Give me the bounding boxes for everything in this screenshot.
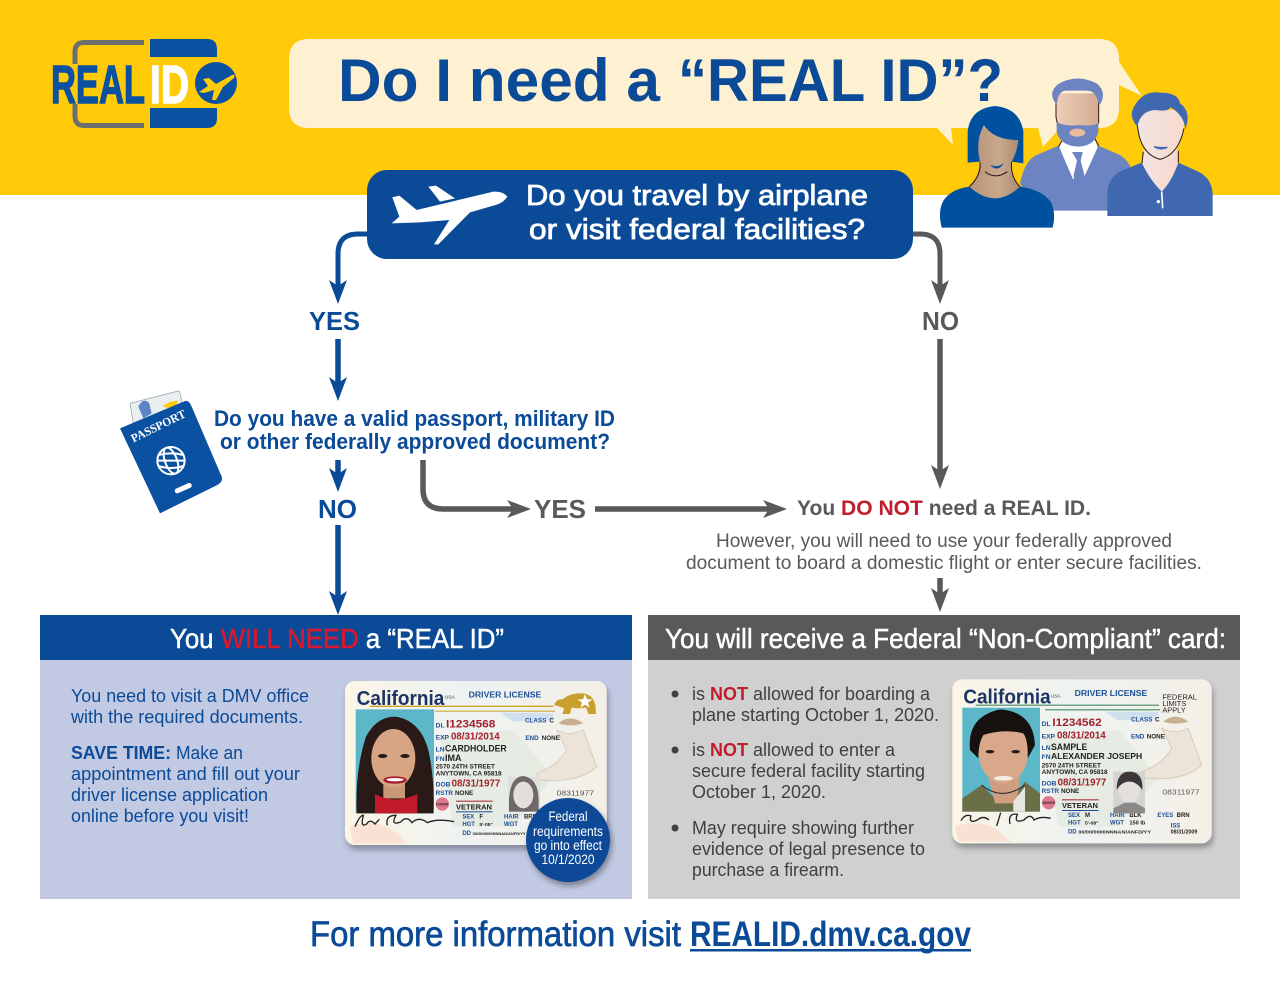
card: non-compliant sample license: FEDERAL <box>1162 694 1197 701</box>
card: REAL ID sample license: 08311977 <box>557 789 594 798</box>
card: non-compliant sample license: LN <box>1042 745 1051 752</box>
card: non-compliant sample license: USA <box>1051 693 1061 698</box>
card: REAL ID sample license: RSTR <box>436 790 453 797</box>
arrow: passport question to YES <box>423 460 523 509</box>
card: non-compliant sample license: DONOR <box>1042 801 1055 805</box>
card: REAL ID sample license: DONOR <box>436 802 449 806</box>
card: non-compliant sample license: 08/31/2009 <box>1171 829 1197 835</box>
card: non-compliant sample license: 08/31/2014 <box>1057 730 1106 741</box>
card: non-compliant sample license: 150 lb <box>1129 821 1146 827</box>
passport question text: Do you have a valid passport, military ID <box>214 406 615 431</box>
question text: or visit federal facilities? <box>529 214 865 246</box>
title: Do I need a <box>338 47 661 114</box>
card: non-compliant sample license: BRN <box>1177 813 1190 819</box>
yellow header band <box>0 0 1280 195</box>
card: non-compliant sample license: ANYTOWN, CA 95818 <box>1042 770 1108 776</box>
card: non-compliant sample license: California <box>963 686 1051 708</box>
arrow: to non-compliant panel <box>937 578 943 604</box>
icon: passport: PASSPORT <box>129 407 188 445</box>
card: non-compliant sample license: 5'-08" <box>1085 821 1099 827</box>
badge: federal requirements: requirements <box>533 824 603 839</box>
card: non-compliant sample license: ALEXANDER JOSEPH <box>1051 751 1142 761</box>
card: non-compliant sample license: 08311977 <box>1162 788 1200 797</box>
icon: airplane <box>392 186 507 244</box>
title: “REAL ID”? <box>678 47 1003 114</box>
card: REAL ID sample license: 2570 24TH STREET <box>436 765 495 771</box>
panel body text: Make an <box>176 742 243 763</box>
label: YES: YES <box>309 306 360 336</box>
badge: federal requirements: Federal <box>548 809 588 824</box>
card: non-compliant sample license: DL <box>1042 721 1051 728</box>
card: non-compliant sample license: LIMITS <box>1162 701 1187 708</box>
person: man with beard <box>1020 78 1132 211</box>
bullet list: plane starting October 1, 2020. <box>692 704 939 725</box>
panel: will need a REAL ID <box>40 615 632 899</box>
label: YES middle: YES <box>534 494 586 524</box>
card: non-compliant sample license: RSTR <box>1042 788 1059 795</box>
card: REAL ID sample license: DD <box>462 831 472 837</box>
bullet list: is NOT allowed for boarding a <box>692 683 935 704</box>
card: REAL ID sample license: USA <box>445 694 455 699</box>
panel body text: appointment and fill out your <box>71 763 300 784</box>
card: non-compliant sample license: M <box>1085 813 1090 819</box>
card: REAL ID sample license: ANYTOWN, CA 95818 <box>436 771 502 777</box>
card: REAL ID sample license: 08/31/1977 <box>452 779 500 790</box>
card: REAL ID sample license: F <box>479 814 483 820</box>
icon: passport <box>120 391 222 513</box>
card: REAL ID sample license: C <box>549 718 554 725</box>
bullet list: purchase a firearm. <box>692 859 844 880</box>
card: REAL ID sample license: 08/31/2014 <box>451 732 500 743</box>
footer link line: For more information visit <box>310 915 681 954</box>
card: REAL ID sample license: LN <box>436 747 445 754</box>
card: non-compliant sample license: C <box>1155 716 1160 723</box>
card: REAL ID sample license: SEX <box>462 814 474 820</box>
panel body text: You need to visit a DMV office <box>71 685 309 706</box>
card: REAL ID sample license: BRN <box>524 814 537 820</box>
card: REAL ID sample license: CARDHOLDER <box>445 744 507 754</box>
card: REAL ID sample license: VETERAN <box>456 802 492 811</box>
flow arrow: top question to YES <box>338 234 367 296</box>
card: non-compliant sample license: SAMPLE <box>1051 742 1087 752</box>
bullet list: May require showing further <box>692 817 914 838</box>
bullet list: evidence of legal presence to <box>692 838 925 859</box>
person: woman <box>940 106 1054 228</box>
card: non-compliant sample license <box>952 679 1212 843</box>
card: non-compliant sample license: EYES <box>1157 813 1173 819</box>
card: non-compliant sample license: 00/00/0000NNNAN/ANFD/YY <box>1078 830 1151 835</box>
panel heading <box>40 615 632 660</box>
panel heading: You will receive a Federal “Non-Compliant” card: <box>665 623 1226 654</box>
card: REAL ID sample license: EXP <box>436 735 450 742</box>
arrow: NO to do not need <box>937 339 943 481</box>
card: non-compliant sample license: ISS <box>1171 823 1180 829</box>
question text: Do you travel by airplane <box>526 180 868 212</box>
card: non-compliant sample license: WGT <box>1110 821 1124 827</box>
card: REAL ID sample license: DRIVER LICENSE <box>469 691 542 700</box>
arrow: NO to WILL NEED panel <box>335 525 341 607</box>
panel heading: You WILL NEED a “REAL ID” <box>170 623 504 654</box>
person: man right <box>1107 92 1213 216</box>
card: non-compliant sample license: I1234562 <box>1052 717 1102 729</box>
card: non-compliant sample license: DD <box>1068 830 1077 836</box>
badge: federal requirements: 10/1/2020 <box>542 852 594 867</box>
passport question text: or other federally approved document? <box>220 429 610 454</box>
panel: non-compliant card <box>648 615 1240 899</box>
bullet list: October 1, 2020. <box>692 781 826 802</box>
card: non-compliant sample license: EXP <box>1042 733 1056 740</box>
card: REAL ID sample license: CLASS <box>525 718 546 725</box>
card: REAL ID sample license: HAIR <box>504 814 519 820</box>
card: non-compliant sample license: 2570 24TH STREET <box>1042 763 1101 769</box>
card: REAL ID sample license: HGT <box>462 822 475 828</box>
result: do not need: You DO NOT need a REAL ID. <box>797 497 1091 520</box>
logo: REAL ID <box>51 39 237 128</box>
card: REAL ID sample license: IMA <box>445 753 462 763</box>
card: non-compliant sample license: BLK <box>1129 813 1142 819</box>
footer url: REALID.dmv.ca.gov <box>690 915 971 954</box>
card: REAL ID sample license <box>345 681 607 845</box>
card: REAL ID sample license: I1234568 <box>446 718 495 730</box>
card: REAL ID sample license: WGT <box>504 822 518 828</box>
card: non-compliant sample license: END <box>1131 734 1145 741</box>
explanation text: document to board a domestic flight or enter secure facilities. <box>686 552 1202 574</box>
logo: REAL ID: REAL <box>51 55 145 115</box>
logo: REAL ID: ID <box>150 55 189 115</box>
card: REAL ID sample license: END <box>525 735 539 742</box>
panel body text: SAVE TIME: <box>71 742 171 763</box>
card: REAL ID sample license: NONE <box>542 735 560 742</box>
flow arrow: top question to NO <box>913 234 940 296</box>
label: NO left: NO <box>318 494 357 524</box>
badge: federal requirements <box>526 798 610 882</box>
panel body text: with the required documents. <box>70 706 303 727</box>
card: non-compliant sample license: NONE <box>1061 788 1079 795</box>
speech bubble with title <box>289 39 1142 147</box>
card: non-compliant sample license: FN <box>1042 754 1051 761</box>
card: non-compliant sample license: NONE <box>1147 734 1165 741</box>
arrow: passport question to NO <box>335 460 341 484</box>
card: non-compliant sample license: APPLY <box>1162 707 1186 714</box>
bullet list: is NOT allowed to enter a <box>692 739 899 760</box>
bullet list: secure federal facility starting <box>692 760 925 781</box>
panel heading <box>648 615 1240 660</box>
card: REAL ID sample license: California <box>357 688 445 710</box>
people icons <box>940 78 1213 228</box>
explanation text: However, you will need to use your federally approved <box>716 530 1172 552</box>
card: non-compliant sample license: HAIR <box>1110 813 1125 819</box>
panel body text: online before you visit! <box>71 805 249 826</box>
card: non-compliant sample license: DRIVER LICENSE <box>1075 689 1148 698</box>
badge: federal requirements: go into effect <box>534 838 602 853</box>
card: non-compliant sample license: CLASS <box>1131 716 1152 723</box>
card: REAL ID sample license: 5'-05" <box>479 822 493 828</box>
card: REAL ID sample license: DOB <box>436 782 451 789</box>
card: REAL ID sample license: DL <box>436 722 445 729</box>
card: non-compliant sample license: VETERAN <box>1062 801 1098 810</box>
card: non-compliant sample license: DOB <box>1042 780 1057 787</box>
card: REAL ID sample license: 00/00/0000NNNAN/ANFD/YY <box>473 831 526 836</box>
bullet list <box>672 683 939 880</box>
label: NO right: NO <box>922 306 959 336</box>
panel body text: driver license application <box>71 784 268 805</box>
card: non-compliant sample license: HGT <box>1068 821 1081 827</box>
question box: airplane <box>367 170 913 259</box>
arrow: YES to passport question <box>335 339 341 393</box>
card: REAL ID sample license: FN <box>436 756 445 763</box>
arrow: YES to do not need <box>595 506 779 512</box>
card: non-compliant sample license: 08/31/1977 <box>1058 777 1106 788</box>
card: REAL ID sample license: NONE <box>455 790 473 797</box>
card: non-compliant sample license: SEX <box>1068 813 1080 819</box>
